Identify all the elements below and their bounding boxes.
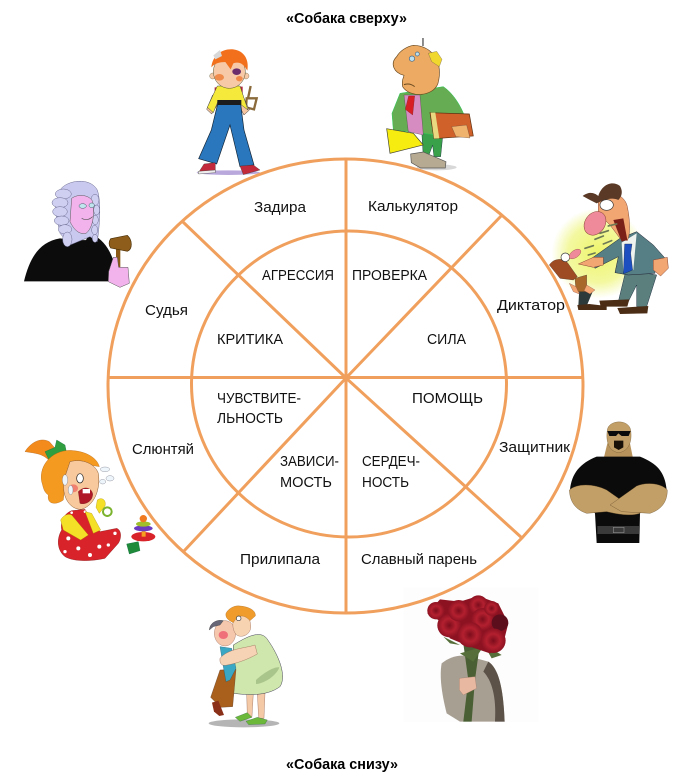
inner labels: МОСТЬ	[280, 475, 332, 491]
lapel	[483, 662, 505, 722]
hair	[41, 450, 99, 503]
cheek	[69, 484, 78, 492]
belt	[597, 526, 639, 534]
blush	[215, 74, 224, 81]
tears	[100, 467, 110, 472]
small man body	[575, 275, 587, 292]
small man hand	[569, 283, 595, 294]
collar	[70, 233, 89, 240]
outer labels: Диктатор	[497, 298, 565, 314]
outer labels	[132, 199, 571, 568]
big man shirt	[622, 233, 637, 272]
slingshot	[246, 86, 257, 109]
backpack straps	[215, 87, 243, 97]
inner labels: ЗАВИСИ-	[280, 454, 339, 470]
wig back	[55, 181, 100, 245]
stems	[463, 643, 480, 722]
shoes	[411, 152, 446, 168]
big man pointing hand	[578, 257, 603, 267]
dress	[58, 509, 121, 561]
glasses	[79, 204, 86, 208]
slippers	[235, 713, 267, 725]
man head	[214, 621, 236, 646]
wheel chart	[108, 159, 583, 613]
inner labels: КРИТИКА	[217, 332, 283, 348]
crossed arms	[569, 485, 640, 515]
suitcase	[387, 129, 423, 153]
big man jacket	[592, 232, 667, 275]
goatee	[614, 441, 623, 450]
hair	[211, 49, 248, 71]
arms	[207, 93, 249, 115]
tie	[405, 96, 415, 115]
outer ring	[108, 159, 583, 613]
woman dress	[233, 634, 283, 695]
outer labels: Задира	[254, 200, 307, 216]
roses	[437, 613, 461, 637]
title: dog below: «Собака снизу»	[286, 757, 398, 773]
hand	[452, 125, 470, 138]
sleeves	[61, 512, 101, 540]
robe	[24, 235, 117, 281]
icon: crying girl	[25, 440, 155, 561]
shadow	[209, 719, 279, 727]
shoes	[198, 163, 260, 175]
shirt	[404, 95, 423, 135]
toy cube	[127, 542, 140, 554]
head	[213, 55, 245, 88]
leaves	[443, 637, 502, 662]
man shoes	[212, 701, 224, 716]
glow	[552, 208, 645, 298]
jeans	[199, 104, 254, 167]
small man legs	[578, 288, 593, 306]
outer labels: Славный парень	[361, 552, 477, 568]
legs	[422, 130, 443, 157]
shadow	[417, 164, 457, 170]
icon: judge	[24, 181, 131, 287]
sunglasses	[607, 431, 631, 436]
shadow	[197, 170, 260, 175]
hand	[459, 677, 477, 695]
big man shoes	[599, 299, 648, 314]
spokes	[108, 159, 583, 613]
jacket	[392, 87, 466, 137]
dress dots	[63, 510, 117, 557]
title: dog on top: «Собака сверху»	[286, 11, 407, 27]
bouquet mass	[427, 596, 508, 653]
icon: man with roses	[403, 587, 538, 722]
big man nose	[580, 207, 610, 239]
woman hair	[226, 606, 255, 623]
big man legs	[618, 270, 657, 307]
inner labels: ПРОВЕРКА	[352, 268, 427, 284]
gavel handle	[116, 248, 120, 273]
suit	[441, 656, 505, 722]
book	[430, 113, 473, 139]
toy pyramid	[131, 532, 155, 541]
ears	[210, 73, 216, 79]
small man shoes	[577, 304, 607, 310]
eye	[77, 474, 83, 483]
hair tuft	[428, 51, 442, 67]
big man eye	[600, 200, 613, 210]
belt	[217, 100, 241, 105]
head spike	[422, 38, 424, 46]
inner labels: ЛЬНОСТЬ	[217, 411, 283, 427]
face	[70, 195, 94, 234]
gavel head	[109, 235, 131, 251]
outer labels: Прилипала	[240, 552, 321, 568]
hug arm	[220, 645, 257, 665]
mouth	[78, 488, 93, 504]
head	[607, 422, 631, 453]
man shirt	[220, 647, 236, 682]
outer labels: Слюнтяй	[132, 442, 194, 458]
outer labels: Судья	[145, 303, 188, 319]
outer labels: Защитник	[499, 440, 571, 456]
inner labels: НОСТЬ	[362, 475, 409, 491]
spit	[585, 224, 617, 255]
icon: dictator shouting	[549, 183, 668, 314]
torso	[570, 457, 667, 543]
small man head	[549, 259, 577, 280]
big man mouth	[613, 218, 627, 242]
neck	[603, 443, 633, 460]
mouth	[82, 217, 93, 220]
head	[393, 45, 439, 94]
inner labels: АГРЕССИЯ	[262, 268, 334, 284]
man hair	[209, 620, 223, 630]
big man fist	[653, 257, 668, 276]
pacifier	[96, 499, 105, 513]
man trousers	[211, 669, 236, 707]
small man nose	[567, 247, 583, 261]
icon: clingy couple	[209, 606, 283, 727]
woman glasses	[236, 616, 241, 621]
hand	[108, 257, 129, 287]
ponytail	[25, 440, 57, 462]
bow	[45, 440, 67, 461]
big man tie	[623, 244, 633, 274]
inner labels	[217, 268, 483, 491]
mouth	[404, 84, 415, 87]
inner ring	[192, 231, 506, 537]
big man head	[598, 193, 630, 241]
outer labels: Калькулятор	[368, 199, 458, 215]
inner labels: СИЛА	[427, 332, 466, 348]
wig curls	[52, 189, 100, 247]
inner labels: СЕРДЕЧ-	[362, 454, 420, 470]
glasses	[409, 56, 415, 61]
black eye	[232, 68, 241, 75]
face	[64, 461, 99, 509]
woman neck and face	[233, 613, 251, 636]
shirt	[207, 86, 248, 113]
icon: bully boy	[197, 49, 260, 175]
icon: calculator man	[387, 38, 473, 170]
woman legs	[247, 693, 265, 718]
photo background	[403, 587, 538, 722]
icon: bodyguard	[569, 422, 667, 543]
big man hair	[583, 183, 622, 203]
inner labels: ПОМОЩЬ	[412, 391, 483, 407]
inner labels: ЧУВСТВИТЕ-	[217, 391, 301, 407]
